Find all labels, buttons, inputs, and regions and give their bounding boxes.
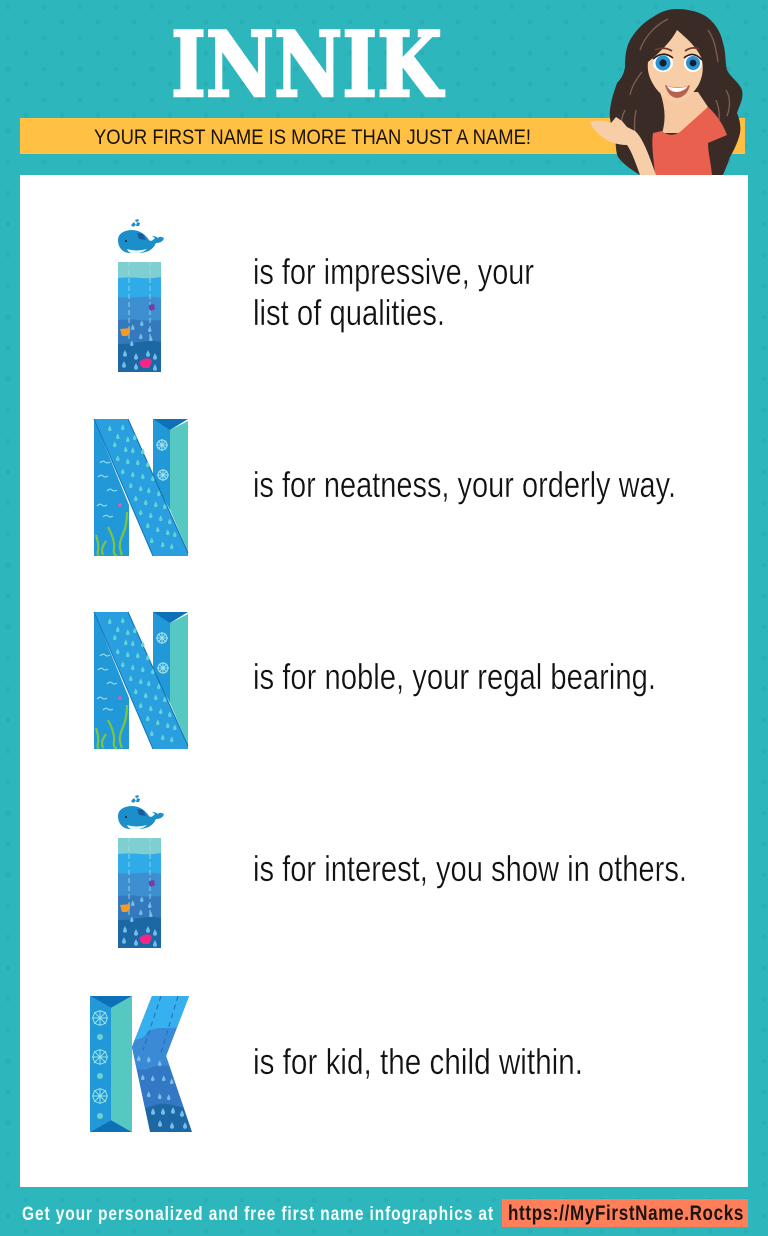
smile bbox=[665, 85, 690, 98]
hair bbox=[610, 9, 742, 175]
row 1: letter I bbox=[118, 219, 534, 372]
icon: letter N bbox=[94, 419, 188, 556]
arm and hand bbox=[590, 117, 656, 175]
icon: letter K bbox=[90, 996, 194, 1132]
icon: letter N bbox=[94, 612, 188, 749]
white content panel bbox=[20, 175, 748, 1187]
icon: letter I with whale bbox=[118, 219, 164, 372]
row 2: letter N bbox=[94, 419, 676, 556]
text: noble: is for noble, your regal bearing. bbox=[253, 656, 656, 697]
shirt bbox=[652, 107, 727, 175]
footer link badge: https://MyFirstName.Rocks bbox=[508, 1202, 744, 1226]
footer text: Get your personalized and free first name infographics at bbox=[22, 1202, 494, 1224]
text: impressive: is for impressive, your bbox=[253, 251, 534, 292]
text: neatness: is for neatness, your orderly way. bbox=[253, 464, 676, 505]
banner text: YOUR FIRST NAME IS MORE THAN JUST A NAME! bbox=[94, 126, 531, 149]
text: kid: is for kid, the child within. bbox=[253, 1041, 583, 1082]
footer bbox=[22, 1199, 748, 1227]
eyes bbox=[653, 48, 702, 72]
text: impressive: list of qualities. bbox=[253, 292, 445, 333]
banner bbox=[20, 118, 745, 154]
row 3: letter N bbox=[94, 612, 656, 749]
title: INNIK bbox=[171, 12, 444, 118]
icon: letter I with whale bbox=[118, 795, 164, 948]
face bbox=[648, 30, 703, 102]
row 5: letter K bbox=[90, 996, 583, 1132]
character: woman with open hand bbox=[590, 9, 742, 175]
neck and chest bbox=[660, 92, 708, 133]
row 4: letter I bbox=[118, 795, 687, 948]
text: impressive bbox=[253, 251, 534, 333]
